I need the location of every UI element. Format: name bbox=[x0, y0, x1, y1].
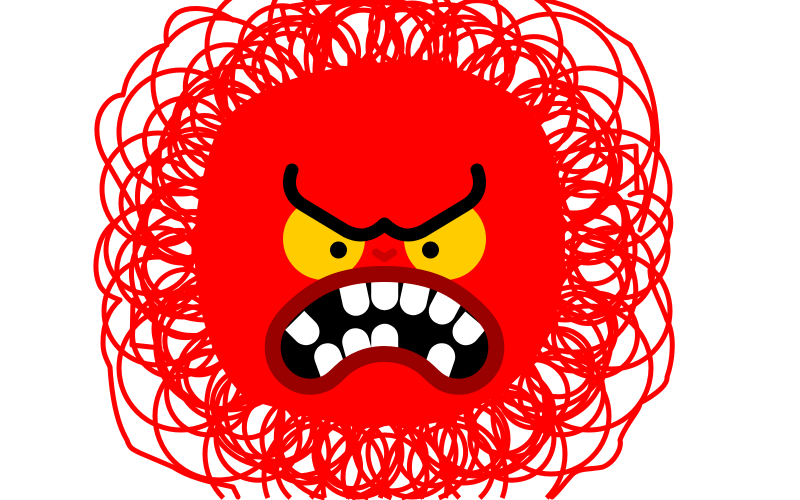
right pupil bbox=[422, 242, 439, 258]
mouth interior bbox=[273, 274, 496, 387]
scribble fur bbox=[96, 0, 672, 499]
right eye bbox=[404, 198, 486, 280]
illustration: angry red scribble monster bbox=[93, 0, 675, 500]
lips bbox=[273, 274, 496, 387]
nose bbox=[376, 252, 393, 258]
red body bbox=[194, 59, 565, 426]
teeth bbox=[285, 282, 484, 377]
left pupil bbox=[330, 242, 347, 258]
mouth bbox=[273, 267, 496, 390]
left eye bbox=[283, 198, 365, 280]
eyebrows bbox=[289, 170, 480, 235]
forehead cover above the brow bbox=[270, 160, 500, 235]
